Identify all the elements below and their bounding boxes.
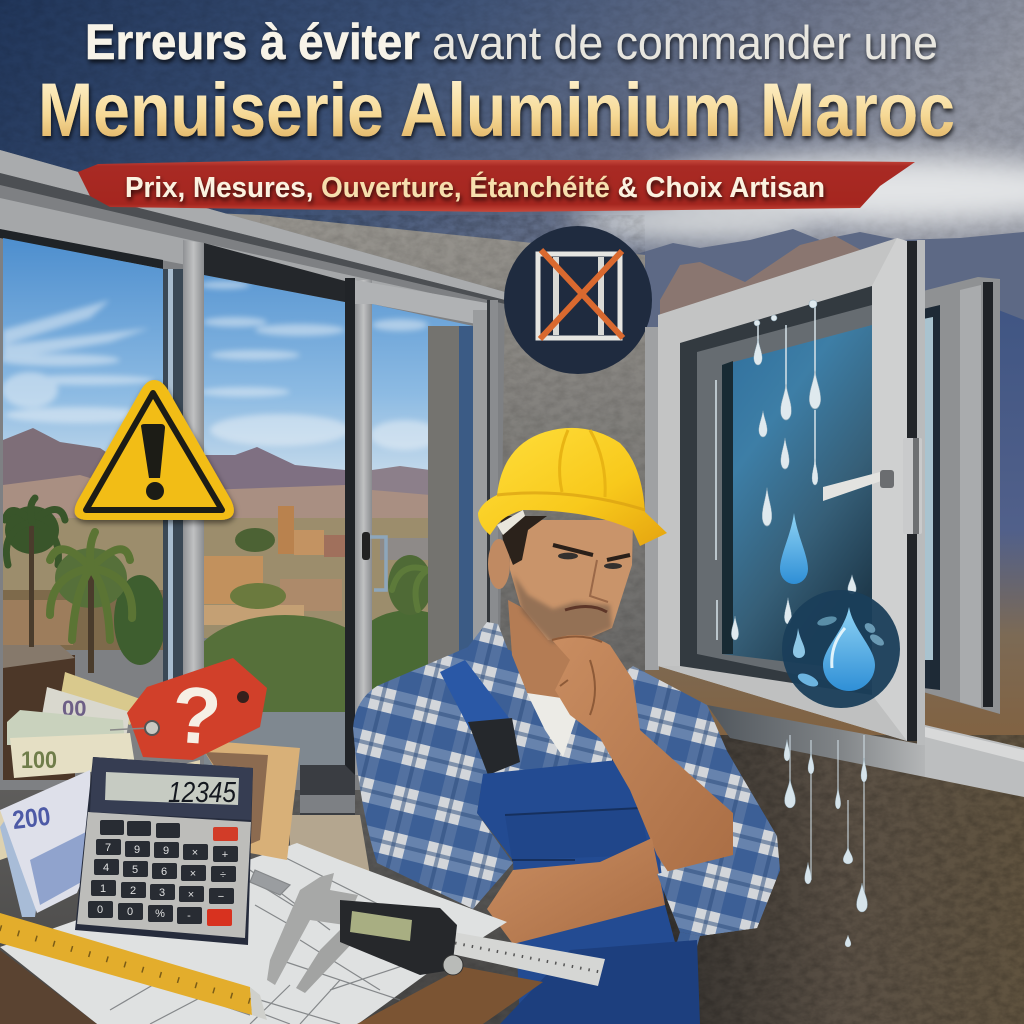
calculator key labels: 4 [103,862,109,874]
t-shirt [527,693,582,757]
caliper body [340,900,457,975]
forearm and hand [552,635,733,890]
mountains [3,428,106,485]
calculator key labels: 5 [132,864,138,876]
money banknotes: 100 [21,747,57,774]
left outer strip [645,327,659,670]
collar [468,622,528,700]
steel ruler [447,932,605,986]
calculator key labels: − [218,891,224,903]
title [38,14,955,153]
handle [823,438,922,534]
sash interior [680,286,872,695]
price tag with question mark: ? [169,670,224,762]
calculator key labels [97,842,228,922]
blueprints [0,843,507,1024]
calculator key labels: ÷ [220,869,226,881]
concrete wall [0,205,645,1024]
calculator key labels: × [192,847,198,859]
title: avant de commander une [432,16,938,69]
calculator key labels: 7 [105,842,111,854]
frame edge [907,241,917,741]
money banknotes: 200 [11,801,52,835]
money banknotes: 00 [62,696,86,721]
crossed window icon [504,226,652,374]
wooden table [0,950,543,1024]
hard hat [478,428,667,546]
calculator key labels: 6 [161,866,167,878]
warning triangle icon [75,380,234,520]
calculator key labels: × [190,868,196,880]
clouds [0,281,440,450]
title: Erreurs à éviter [85,14,420,70]
large blue drop on glass [780,513,808,584]
mullions [163,269,183,739]
cuff [657,850,780,936]
left arm sleeve [353,647,513,909]
calculator key labels: 2 [130,885,136,897]
calculator keys [88,820,238,924]
reflected concrete pillar [428,326,459,664]
caliper and ruler [267,873,605,993]
view through the glass [0,230,480,785]
outer frame [0,150,505,790]
money banknotes [0,672,300,917]
price tag with question mark [110,658,267,762]
subtitle banner: Prix, Mesures, Ouverture, Étanchéité & Choix Artisan [125,170,825,204]
calculator key labels: - [187,910,191,922]
right window with water leak [645,238,1024,947]
caliper jaws [267,873,358,985]
calculator key labels: % [155,908,165,920]
overalls [440,660,700,1024]
wood floor corner [0,950,97,1024]
calculator key labels: + [222,849,228,861]
window sill [707,705,1024,797]
right background: mountains and sky-to-wall blend [637,229,1024,770]
worker [353,428,780,1024]
right shoulder and sleeve [633,666,780,936]
brick building [3,600,73,645]
calculator key labels: 1 [100,883,106,895]
greenery [230,583,286,609]
shirt chest [468,647,650,790]
balcony floor [204,712,345,770]
calculator key labels: 0 [127,906,133,918]
sleeve hem [670,932,700,972]
left sliding window [0,150,505,815]
water drop icon [782,590,900,708]
floor tiles [290,815,370,875]
calculator key labels: 9 [134,844,140,856]
water drops and streaks [716,300,856,640]
head [488,516,633,643]
neck [508,600,582,702]
calculator key labels: 0 [97,904,103,916]
lower right wall [660,735,1024,1024]
white frame [658,238,907,741]
lower arm [487,838,665,944]
calculator key labels: 3 [159,887,165,899]
background sky [0,0,1024,300]
calculator key labels: 9 [163,845,169,857]
subtitle banner [78,160,915,212]
calculator: 12345 [168,777,237,809]
door handle [362,532,386,590]
side sash [923,277,1000,714]
yellow tape measure [0,913,267,1020]
drips below window [784,735,867,947]
palm trees [5,498,428,673]
calculator [75,757,253,945]
calculator key labels: × [188,889,194,901]
town [3,518,428,638]
